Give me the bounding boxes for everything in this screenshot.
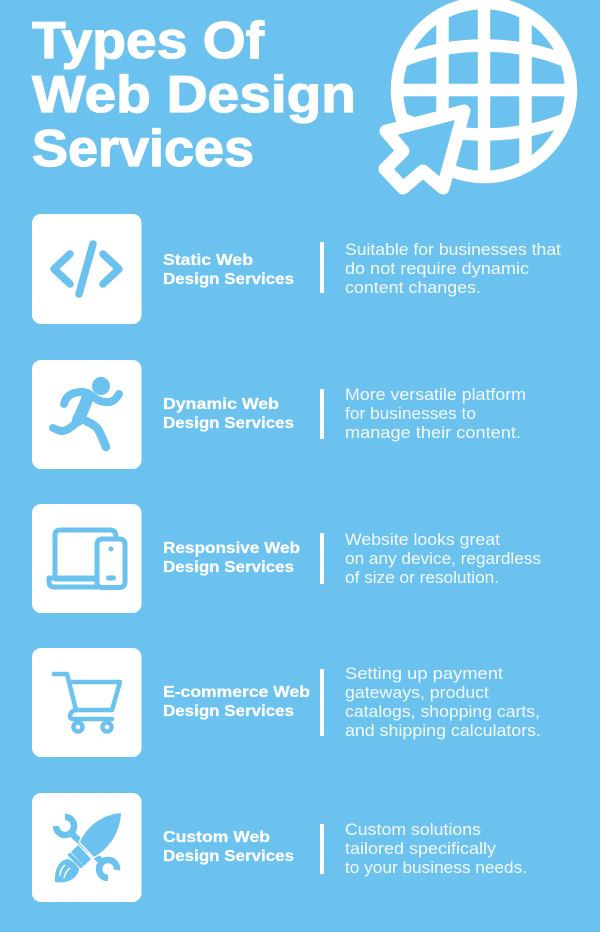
panel: custom web design xyxy=(32,793,527,902)
description: e-commerce: catalogs, shopping carts, xyxy=(345,703,540,721)
label: responsive: Design Services xyxy=(163,559,294,576)
label: dynamic: Dynamic Web xyxy=(163,396,279,413)
panel: dynamic web design xyxy=(32,360,526,469)
card: static xyxy=(32,214,142,324)
label: static: Static Web xyxy=(163,252,253,269)
description: custom: tailored specifically xyxy=(345,840,497,858)
title xyxy=(32,12,356,178)
description: dynamic: manage their content. xyxy=(345,424,521,442)
card: dynamic xyxy=(32,360,142,469)
description: static: Suitable for businesses that xyxy=(345,241,561,259)
icon: running person xyxy=(53,377,119,447)
description: static: do not require dynamic xyxy=(345,260,529,278)
description: custom: Custom solutions xyxy=(345,821,481,839)
label: responsive xyxy=(163,540,300,576)
description: custom xyxy=(320,821,527,877)
label: dynamic: Design Services xyxy=(163,415,294,432)
label: e-commerce: E-commerce Web xyxy=(163,684,310,701)
label: dynamic xyxy=(163,396,294,432)
label: e-commerce: Design Services xyxy=(163,703,294,720)
label: responsive: Responsive Web xyxy=(163,540,300,557)
panel: responsive web design xyxy=(32,504,541,613)
description: e-commerce: and shipping calculators. xyxy=(345,722,541,740)
label: static: Design Services xyxy=(163,271,294,288)
description: dynamic xyxy=(320,386,526,442)
description: e-commerce: Setting up payment xyxy=(345,665,503,683)
icon: laptop and phone xyxy=(49,530,125,588)
card: responsive xyxy=(32,504,142,613)
description: custom: to your business needs. xyxy=(345,859,527,877)
description: static xyxy=(320,241,561,297)
description: dynamic: for businesses to xyxy=(345,405,476,423)
title: Services xyxy=(32,120,254,178)
description: responsive xyxy=(320,531,541,587)
icon: globe with cursor xyxy=(385,0,571,188)
card: custom xyxy=(32,793,142,902)
description: responsive: on any device, regardless xyxy=(345,550,541,568)
description: e-commerce: gateways, product xyxy=(345,684,489,702)
title: Web Design xyxy=(32,66,356,124)
icon: code brackets xyxy=(54,244,119,294)
title: Types Of xyxy=(32,12,265,70)
description: dynamic: More versatile platform xyxy=(345,386,526,404)
icon: brush and wrench xyxy=(55,813,121,882)
label: static xyxy=(163,252,294,288)
description: responsive: of size or resolution. xyxy=(345,569,499,587)
card: e-commerce xyxy=(32,648,142,757)
label: custom: Custom Web xyxy=(163,829,270,846)
label: e-commerce xyxy=(163,684,310,720)
icon: shopping cart xyxy=(54,674,120,732)
description: e-commerce xyxy=(320,665,541,740)
panel: e-commerce web design xyxy=(32,648,541,757)
description: responsive: Website looks great xyxy=(345,531,500,549)
label: custom xyxy=(163,829,294,865)
panel: static web design xyxy=(32,214,561,324)
label: custom: Design Services xyxy=(163,848,294,865)
description: static: content changes. xyxy=(345,279,481,297)
